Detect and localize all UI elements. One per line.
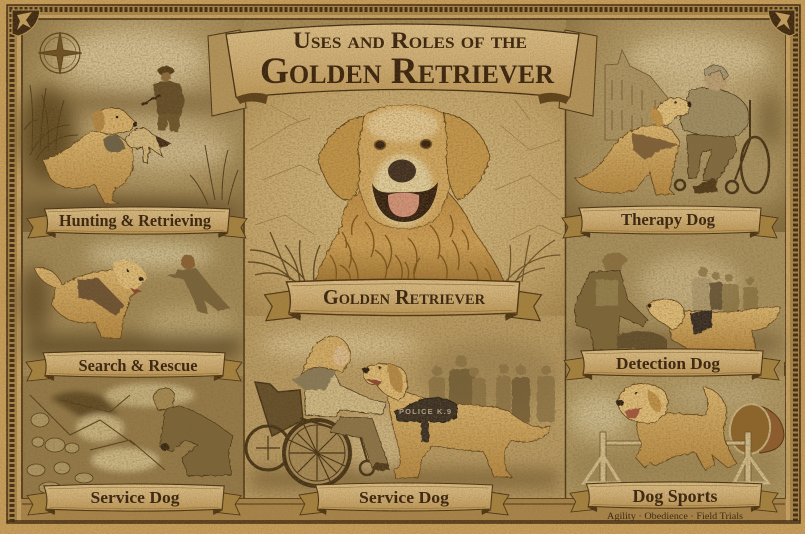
agility jump bbox=[584, 432, 768, 484]
city building bbox=[605, 50, 668, 140]
rescuer figure bbox=[168, 255, 230, 314]
reeds bbox=[24, 85, 238, 205]
head bbox=[350, 105, 458, 229]
banner: Hunting and Retrieving bbox=[27, 207, 247, 238]
grass right bbox=[505, 235, 560, 284]
sports background bbox=[570, 381, 780, 486]
scene tones bbox=[250, 331, 560, 488]
corner ornament: top right bbox=[768, 10, 795, 36]
search dog with harness bbox=[34, 260, 147, 338]
wheelchair bbox=[246, 382, 374, 486]
dog with duck bbox=[43, 108, 172, 204]
banner: Service Dog left bbox=[27, 484, 241, 515]
background crowd bbox=[429, 355, 555, 423]
detection dog bbox=[647, 299, 780, 350]
fur strokes bbox=[330, 215, 491, 283]
panel: therapy dog bbox=[566, 20, 785, 236]
rubble terrain bbox=[27, 383, 195, 494]
title line one: Uses and Roles of the bbox=[293, 28, 527, 53]
banner: Service Dog center: Service Dog bbox=[359, 488, 450, 507]
banner: Search and Rescue: Search & Rescue bbox=[78, 356, 198, 375]
left ear bbox=[318, 116, 364, 200]
panel: detection dog bbox=[566, 232, 785, 362]
mouth bbox=[372, 182, 438, 222]
banner: Detection Dog bbox=[564, 349, 780, 380]
panel: hunting and retrieving bbox=[20, 20, 244, 236]
therapy background tones bbox=[580, 36, 782, 200]
title scroll tail: right bbox=[559, 30, 597, 116]
handler soldier bbox=[575, 252, 648, 350]
golden retriever portrait bbox=[314, 105, 506, 286]
banner: Service Dog center bbox=[299, 483, 509, 515]
banner: Dog Sports: Dog Sports bbox=[632, 486, 718, 506]
police vest bbox=[395, 398, 457, 422]
gear bags bbox=[617, 331, 667, 350]
banner: Golden Retriever bbox=[265, 279, 541, 321]
banner: Service Dog left: Service Dog bbox=[90, 488, 180, 507]
panel: central portrait bbox=[245, 90, 565, 316]
forehead highlight bbox=[367, 108, 439, 142]
grass left bbox=[248, 232, 320, 285]
hunter figure bbox=[142, 66, 185, 132]
right ear bbox=[444, 113, 490, 200]
panel: service dog rubble scene bbox=[23, 376, 244, 498]
nose bbox=[388, 160, 416, 182]
panel dividers bbox=[244, 90, 566, 498]
eyes bbox=[374, 140, 432, 150]
panel: search and rescue bbox=[19, 232, 244, 362]
banner: Dog Sports bbox=[570, 482, 778, 512]
scroll curl left bbox=[236, 93, 268, 104]
title banner bbox=[226, 24, 579, 104]
banner: Therapy Dog: Therapy Dog bbox=[621, 210, 715, 229]
search background terrain bbox=[19, 242, 240, 357]
icon: compass rose bbox=[38, 32, 82, 74]
background crowd bbox=[692, 267, 758, 312]
service dog bbox=[362, 364, 550, 479]
vest text: POLICE K.9 bbox=[399, 407, 451, 416]
title line two: Golden Retriever bbox=[260, 51, 554, 92]
body mane bbox=[314, 192, 506, 286]
banner: Golden Retriever: Golden Retriever bbox=[323, 285, 485, 309]
caption: sports disciplines: Agility · Obedience · Field Trials bbox=[607, 512, 743, 522]
kneeling worker figure bbox=[153, 388, 233, 476]
jumping dog bbox=[616, 383, 737, 470]
agility tunnel bbox=[727, 401, 784, 457]
man in wheelchair bbox=[675, 65, 769, 194]
banner: Therapy Dog bbox=[562, 206, 778, 238]
title scroll tail: left bbox=[208, 30, 246, 116]
cracks bbox=[250, 100, 562, 240]
muzzle bbox=[373, 154, 433, 226]
banner: Detection Dog: Detection Dog bbox=[616, 354, 720, 373]
detection background bbox=[570, 255, 780, 351]
corner ornament: top left bbox=[12, 10, 40, 36]
banner: Hunting and Retrieving: Hunting & Retrieving bbox=[59, 211, 212, 230]
panel: central service dog bbox=[245, 312, 565, 498]
tongue bbox=[388, 192, 419, 217]
scroll curl right bbox=[538, 93, 570, 104]
hunting sky and water light areas bbox=[20, 32, 240, 226]
therapy dog bbox=[575, 98, 691, 195]
panel: dog sports bbox=[566, 376, 785, 498]
woman bbox=[292, 336, 390, 471]
banner: Search and Rescue bbox=[26, 351, 242, 381]
